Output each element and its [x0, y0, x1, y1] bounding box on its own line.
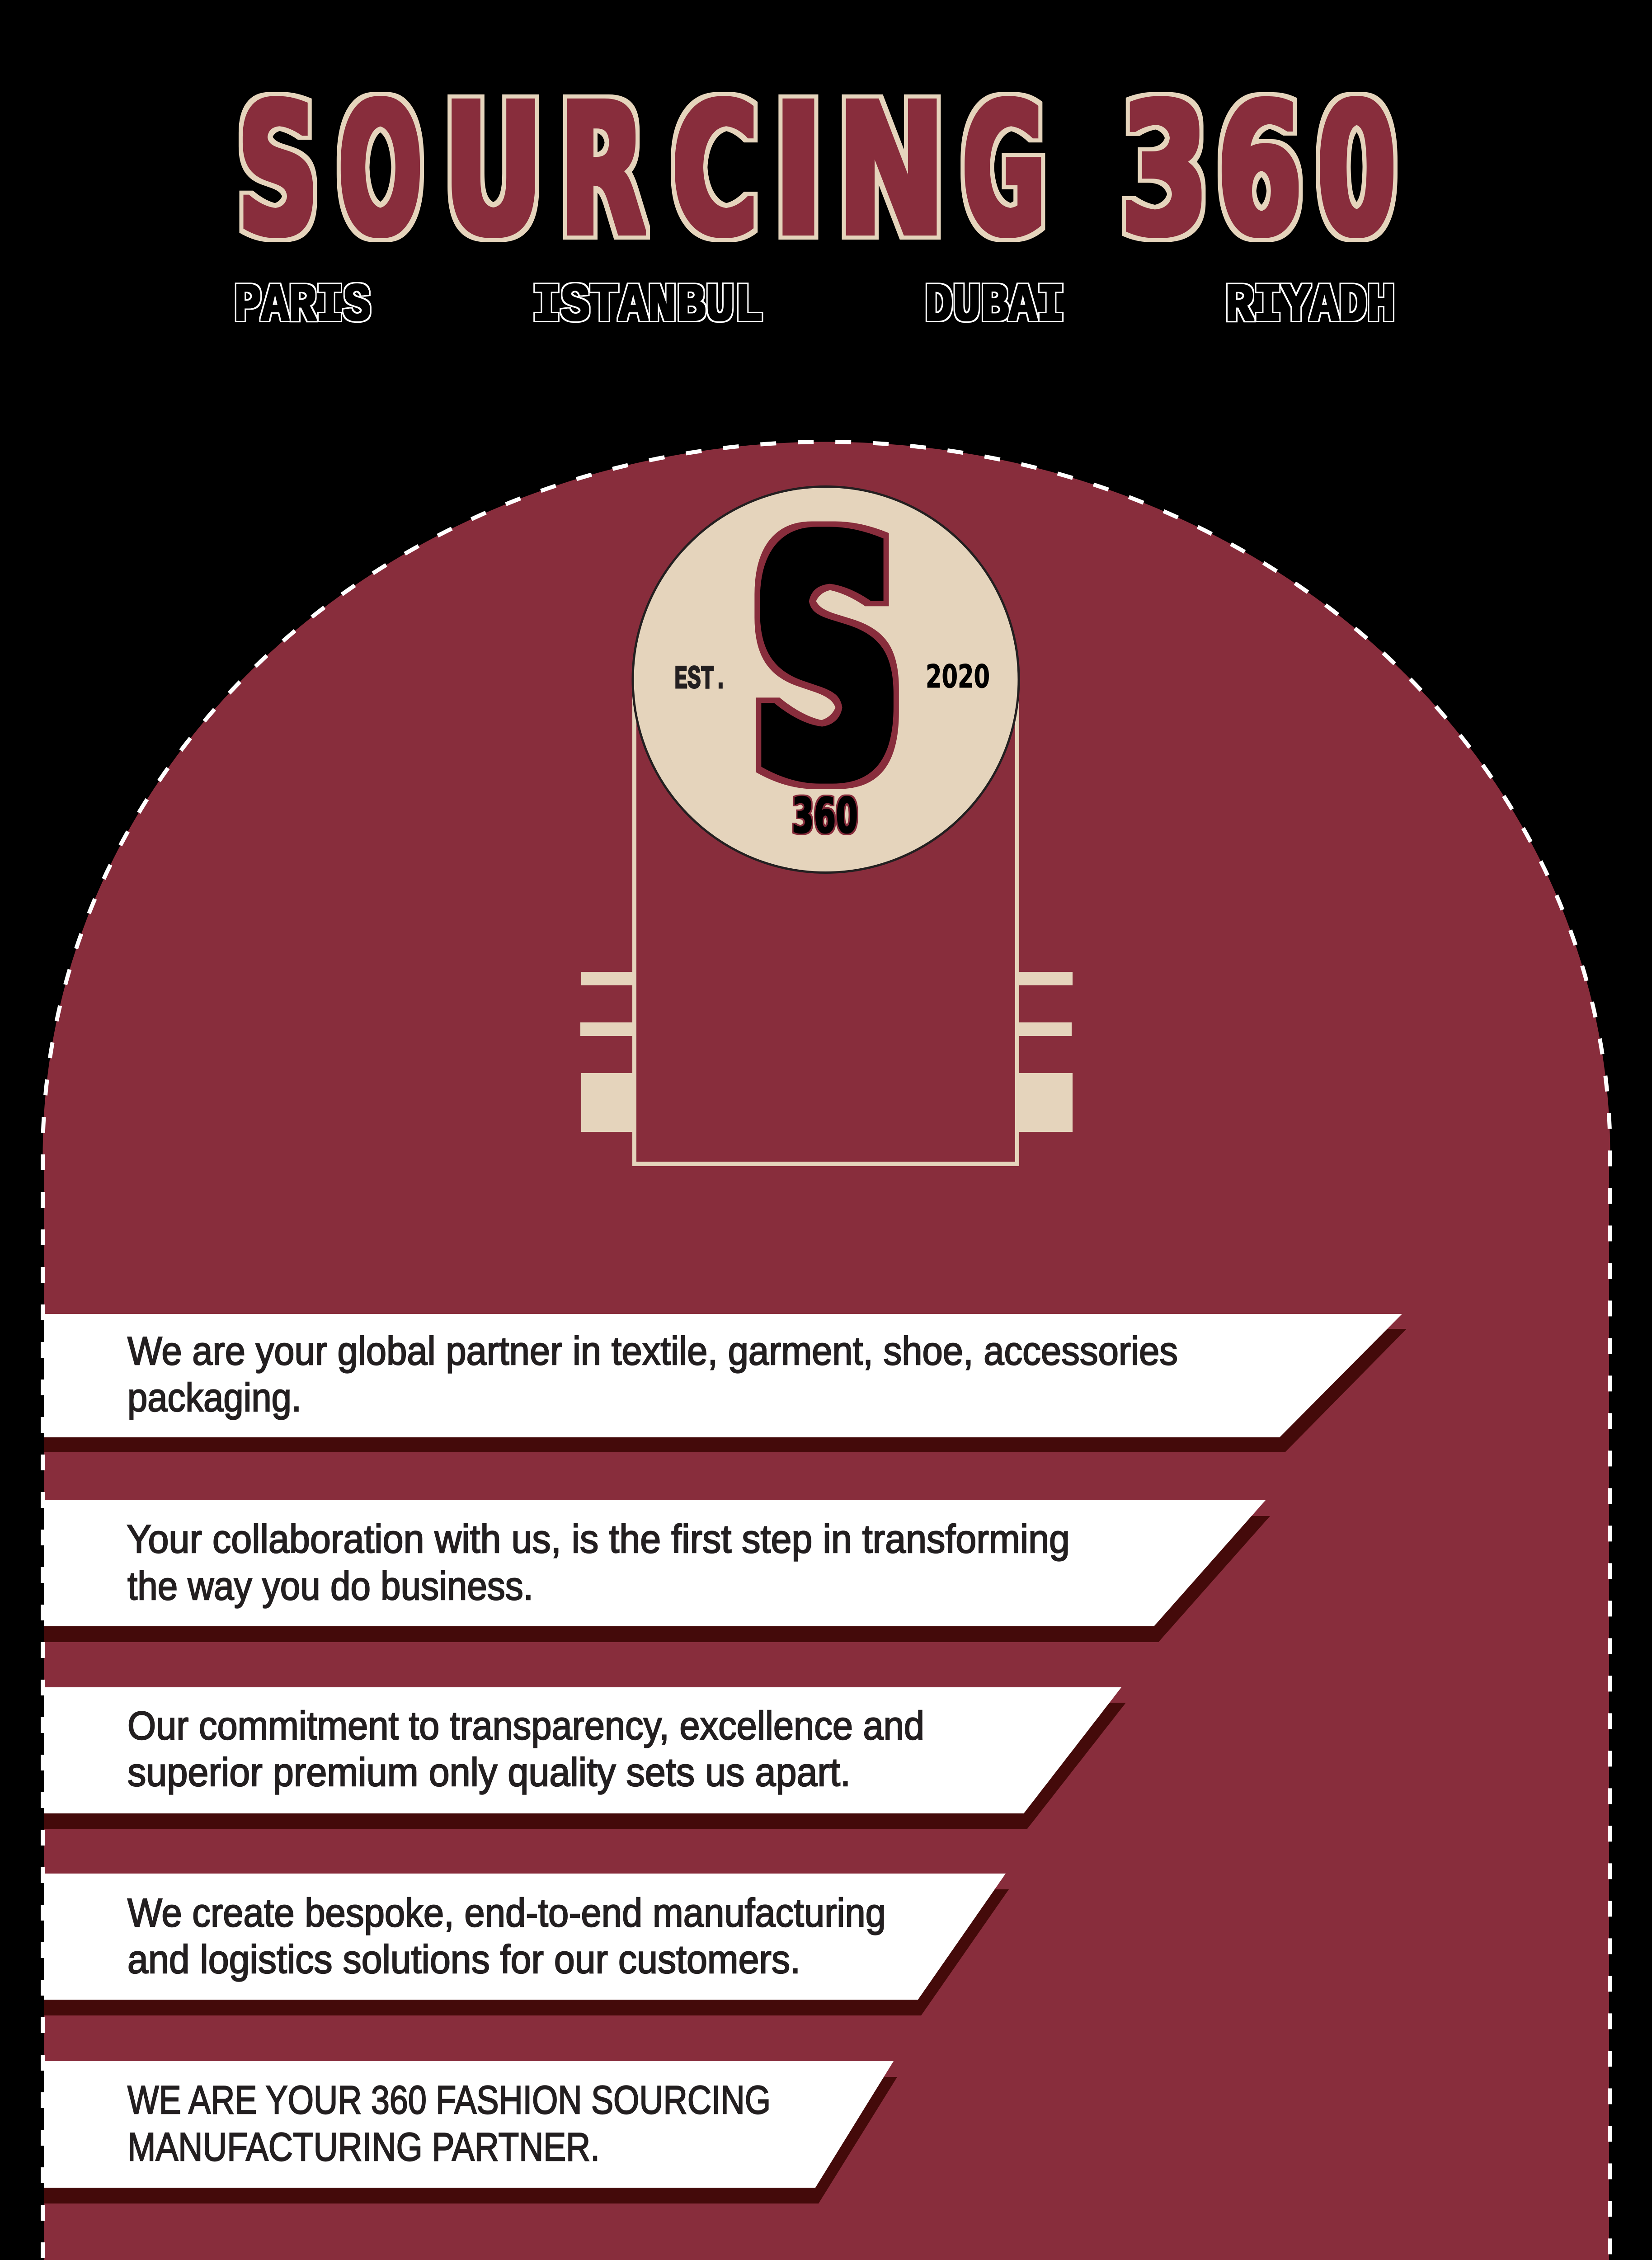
panel: maroon arch: [42, 442, 1610, 2260]
banner 2: the way you do business.: [127, 1563, 533, 1608]
city: Istanbul: ISTANBUL: [532, 276, 763, 336]
banner 3: [44, 1687, 1126, 1829]
logo badge: [633, 474, 1019, 872]
banner 4: and logistics solutions for our customers.: [127, 1937, 800, 1982]
title: [237, 66, 1396, 276]
banner 1: [44, 1314, 1407, 1452]
title: U: [443, 66, 544, 276]
banner 1: We are your global partner in textile, garment, shoe, accessories: [127, 1328, 1178, 1373]
logo frame with tabs: [580, 678, 1073, 1166]
banner 4: [44, 1874, 1009, 2015]
title: I: [772, 66, 824, 276]
badge text: est.: EST.: [674, 661, 727, 698]
title: O: [339, 66, 422, 276]
city: Riyadh: RIYADH: [1225, 276, 1395, 336]
title: C: [672, 66, 758, 276]
title: G: [962, 66, 1046, 276]
badge monogram S: S: [751, 474, 903, 849]
title: 0: [1317, 66, 1396, 276]
title: R: [560, 66, 645, 276]
banner 2: Your collaboration with us, is the first step in transforming: [127, 1516, 1070, 1561]
title: 3: [1120, 66, 1209, 276]
badge circle: [633, 486, 1019, 872]
city list: [234, 276, 1395, 336]
banner 3: Our commitment to transparency, excellence and: [127, 1703, 924, 1748]
banner 5: [44, 2061, 897, 2204]
banner 2: [44, 1500, 1270, 1642]
badge text: 360: 360: [792, 788, 858, 844]
arch dashed border: [42, 442, 1610, 2260]
badge text: 2020: 2020: [926, 658, 990, 695]
title: S: [237, 66, 319, 276]
city: Dubai: DUBAI: [925, 276, 1065, 336]
title: N: [837, 66, 946, 276]
city: Paris: PARIS: [234, 276, 371, 336]
banner 3: superior premium only quality sets us apart.: [127, 1750, 851, 1794]
banner 1: packaging.: [127, 1375, 301, 1420]
banner 5: WE ARE YOUR 360 FASHION SOURCING: [127, 2077, 771, 2122]
banner 4: We create bespoke, end-to-end manufacturing: [127, 1890, 886, 1935]
banner 5: MANUFACTURING PARTNER.: [127, 2124, 600, 2169]
title: 6: [1217, 66, 1303, 276]
